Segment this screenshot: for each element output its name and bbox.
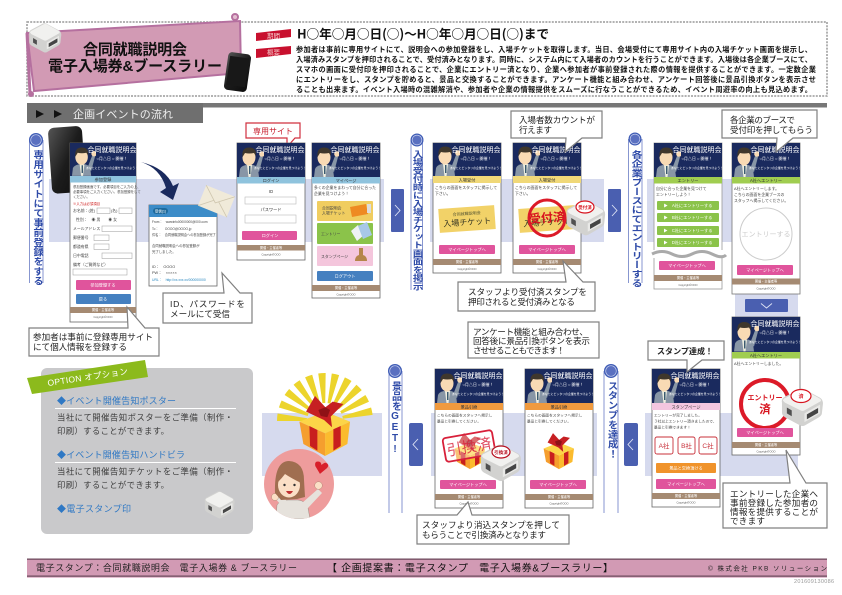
- arrow: down: [745, 299, 788, 312]
- phone: stamp page: 景品と引換できます！: [654, 424, 691, 430]
- step label 4: [388, 364, 402, 513]
- period label: 期間: [267, 32, 280, 40]
- phone: reception ticket: Copyright©OOO: [457, 267, 477, 271]
- email card: URL： http://xx.xxx.xx/000000000: [152, 278, 206, 282]
- band: prize: [262, 413, 382, 476]
- option item: handbill: ◆イベント開催告知ハンドビラ: [57, 449, 185, 460]
- phone: entry completed: マイページトップへ: [746, 430, 784, 436]
- stamp mark: exchanged: [442, 430, 496, 462]
- phone: registration form: あなたにピッタリの企業を見つけよう！: [86, 165, 138, 170]
- callout: reception stamp: [458, 261, 595, 311]
- step label 2: 入場受付時に入場チケット画面を掲示: [411, 150, 423, 290]
- option tag: [27, 360, 148, 394]
- callout: visitor count: [511, 111, 602, 152]
- phone: registration form: Copyright©OOO: [93, 315, 113, 319]
- phone: stamp page: B社: [681, 441, 692, 450]
- phone: registration form: ください。: [73, 194, 90, 199]
- summary text: にエントリーをし、スタンプを貯めると、景品と交換することができます。アンケート機能と組み合わせ、アンケート回答後に景品引換ボタンを表示させ: [296, 75, 816, 84]
- phone: login: ○月△日 ○ 開催！: [264, 155, 296, 161]
- icon: large smartphone: [48, 126, 86, 194]
- band: step 1: [49, 179, 384, 242]
- arrow: next step 1: [391, 189, 404, 232]
- step label 5: [604, 364, 618, 513]
- phone: entry list: 自分に合った企業を見つけて: [656, 186, 707, 191]
- callout: booth stamp: [722, 110, 817, 152]
- summary text: スマホの画面に受付印を押印されることで、企業にエントリー済となり、企業へ参加者が事前登録された際の情報を提供することができます。一定数企業: [296, 65, 816, 74]
- phone: prize exchange: 合同就職説明会: [544, 371, 592, 380]
- step label 4: 景品をGET!: [390, 381, 402, 455]
- email card: 受信(1): [155, 208, 166, 214]
- phone: registration form: 開催・主催者等: [92, 307, 115, 312]
- phone: company entry: 開催・主催者等: [755, 279, 778, 284]
- summary label: 概要: [267, 48, 280, 56]
- phone: reception stamped: 下さい。: [515, 191, 531, 196]
- phone: entry list: 合同就職説明会: [672, 145, 722, 154]
- phone: reception stamped: 入場受付: [539, 176, 555, 184]
- callout: stamp completed: スタンプ達成！: [657, 346, 713, 356]
- option item: handbill: [55, 449, 236, 490]
- phone: prize exchange stamped: マイページトップへ: [449, 482, 487, 488]
- phone: entry completed: 済: [759, 402, 771, 416]
- phone: reception ticket: 開催・主催者等: [456, 259, 479, 264]
- icon: stamp device with exchange mark: [481, 445, 521, 481]
- email card: ID： OOOO: [152, 265, 175, 269]
- phone: entry list: ▶ B社にエントリーする: [664, 214, 712, 221]
- phone: prize exchange stamped: Copyright©OOO: [459, 502, 479, 506]
- phone: entry completed: あなたにピッタリの企業を見つけよう！: [749, 339, 801, 344]
- section heading: event flow: [27, 103, 827, 123]
- phone: entry completed: A社へエントリーしました。: [734, 361, 783, 366]
- phone: my page: Copyright©OOO: [336, 292, 356, 296]
- phone: registration form: ※入力は必須項目: [73, 201, 100, 206]
- phone: reception stamped: Copyright©OOO: [537, 267, 557, 271]
- callout: provide information: 事前登録した参加者の: [730, 497, 818, 508]
- phone: reception ticket: 合同就職説明会: [452, 145, 500, 154]
- icon: stamp device with received mark: 受付済: [578, 204, 592, 211]
- phone: stamp page: C社: [702, 441, 714, 450]
- callout: survey function: アンケート機能と組み合わせ、: [473, 326, 588, 337]
- icon: option stamp device: [205, 491, 235, 518]
- phone: prize exchange stamped: 開催・主催者等: [458, 494, 481, 499]
- phone: registration form: 参加登録: [95, 176, 112, 183]
- phone: reception stamped: 入場チケット: [523, 215, 571, 229]
- phone: reception stamped: 合同就職説明会: [532, 145, 580, 154]
- phone: company entry: ○月△日 ○ 開催！: [759, 155, 791, 161]
- phone: registration form: 都道府県: [73, 244, 89, 249]
- callout: survey function: [468, 322, 599, 358]
- option tag: OPTION オプション: [47, 366, 128, 388]
- phone: entry completed: ○月△日 ○ 開催！: [759, 329, 791, 335]
- option item: handbill: 当社にて開催告知チケットをご準備（制作・: [57, 466, 233, 476]
- phone: registration form: 郵便番号: [73, 235, 89, 240]
- footer copyright: © 株式会社 PKB ソリューション: [708, 564, 827, 572]
- phone: my page: 合同就職説明会: [330, 145, 380, 154]
- phone: reception stamped: [513, 143, 582, 273]
- band: step 3: [647, 179, 800, 242]
- footer left text: 電子スタンプ：合同就職説明会 電子入場券 & ブースラリー: [36, 562, 297, 573]
- callout: registration: [29, 307, 159, 356]
- phone: prize exchange stamped: 景品と引換してください。: [437, 418, 481, 424]
- callout: ID and password by mail: メールにて受信: [170, 308, 230, 319]
- phone: reception ticket: こちらの画面をスタッフに掲示して: [435, 185, 497, 190]
- phone: company entry: A社へエントリーします。: [734, 186, 779, 191]
- phone: stamp page: ○月△日 ○ 開催！: [679, 381, 711, 387]
- icon: stamp device with received mark: [566, 200, 605, 235]
- callout: exchange stamp: スタッフより消込スタンプを押して: [422, 519, 560, 530]
- icon: gift box: [299, 396, 350, 456]
- phone: reception stamped: ○月△日 ○ 開催！: [540, 155, 572, 161]
- phone: login: パスワード: [261, 207, 281, 212]
- stamp mark: received: 受付済: [528, 209, 565, 226]
- phone: stamp page: 開催・主催者等: [675, 493, 698, 498]
- section heading: event flow: 企画イベントの流れ: [73, 107, 173, 121]
- phone: stamp page: A社: [659, 441, 670, 450]
- callout: survey function: させせることもできます！: [473, 346, 565, 356]
- email card: 件名： 合同就職説明会への参加登録が完了: [152, 232, 216, 237]
- footer center text: 【 企画提案書：電子スタンプ 電子入場券&ブースラリー】: [327, 562, 613, 574]
- option item: stamp: ◆電子スタンプ印: [57, 503, 131, 514]
- phone: stamp page: [652, 369, 721, 507]
- phone: entry list: あなたにピッタリの企業を見つけよう！: [671, 165, 723, 170]
- email card: From： wwwinfo00000000@000.com: [152, 220, 208, 224]
- icon: stamp device with entry mark: 済: [798, 393, 804, 400]
- phone: prize exchange: 開催・主催者等: [548, 494, 571, 499]
- phone: stamp page: 合同就職説明会: [670, 371, 720, 380]
- phone: entry completed: Copyright©OOO: [756, 450, 776, 454]
- phone: prize exchange stamped: 合同就職説明会: [454, 371, 502, 380]
- option item: poster: [55, 395, 236, 436]
- icon: envelope: [198, 185, 235, 217]
- phone: stamp page: マイページトップへ: [667, 482, 705, 488]
- phone: stamp page: あなたにピッタリの企業を見つけよう！: [669, 391, 721, 396]
- phone: my page: スタンプページ: [321, 254, 348, 259]
- phone: entry list: ○月△日 ○ 開催！: [681, 155, 713, 161]
- phone: prize exchange: こちらの画面をスタッフへ掲示し: [527, 412, 583, 418]
- phone: prize exchange stamped: あなたにピッタリの企業を見つけよう！: [452, 391, 504, 396]
- panel: option: [27, 360, 253, 534]
- callout: dedicated site: 専用サイト: [253, 126, 293, 136]
- callout: provide information: 情報を提供することが: [730, 506, 818, 517]
- phone: company entry: Copyright©OOO: [756, 286, 776, 290]
- subtitle: 電子入場券&ブースラリー: [48, 57, 222, 75]
- phone: prize exchange stamped: 景品引換: [461, 404, 478, 410]
- callout: survey function: 回答後に景品引換ボタンを表示: [473, 335, 590, 346]
- phone: my page: 企業を見つけよう！: [314, 191, 349, 196]
- callout: booth stamp: 受付印を押してもらう: [730, 124, 813, 135]
- summary text: 入場済みスタンプを押印されることで、受付済みとなります。同時に、システム内にて入場者のカウントを行うことができます。入場後は各企業ブースにて、: [296, 55, 812, 64]
- phone: stamp page: 景品と交換頂ける: [669, 464, 703, 472]
- phone: company entry: A社へエントリー: [750, 177, 782, 184]
- band: step 2: [430, 179, 604, 242]
- phone: registration form: 性別： ◉ 男 ◉ 女: [76, 217, 117, 222]
- illustration: cheering woman: [264, 449, 334, 519]
- phone: prize exchange: マイページトップへ: [539, 482, 577, 488]
- step label 5: スタンプを達成！: [605, 381, 618, 459]
- sun rays: [292, 388, 358, 421]
- phone: company entry: [732, 143, 801, 294]
- phone: my page: あなたにピッタリの企業を見つけよう！: [329, 165, 381, 170]
- callout: registration: にて個人情報を登録する: [33, 341, 127, 352]
- phone: login: Copyright©OOO: [261, 252, 281, 256]
- phone: registration form: [70, 143, 141, 322]
- phone: company entry: 合同就職説明会: [750, 145, 800, 154]
- callout: stamp completed: [648, 341, 724, 372]
- icon: stamp device with exchange mark: 引換済: [494, 449, 508, 456]
- phone: reception ticket: ○月△日 ○ 開催！: [460, 155, 492, 161]
- title ribbon: [27, 14, 241, 97]
- phone: entry completed: [732, 317, 801, 455]
- icon: stamp device in title: [29, 23, 61, 52]
- phone: reception stamped: マイページトップへ: [528, 247, 566, 253]
- phone: login: ログイン: [263, 177, 279, 184]
- phone: prize exchange: Copyright©OOO: [549, 502, 569, 506]
- phone: registration form: 合同就職説明会: [88, 145, 136, 154]
- summary text: [296, 45, 816, 94]
- option item: handbill: 印刷）することができます。: [57, 480, 169, 490]
- phone: my page: ログアウト: [335, 272, 355, 280]
- phone: entry completed: 合同就職説明会: [750, 319, 800, 328]
- phone: prize exchange: [525, 369, 594, 508]
- phone: my page: エントリー: [321, 232, 341, 236]
- arrow: next step 2: [608, 189, 621, 232]
- period date: H○年○月○日(○)〜H○年○月○日(○)まで: [297, 24, 549, 42]
- callout: provide information: [723, 450, 827, 528]
- callout: provide information: エントリーした企業へ: [730, 488, 818, 499]
- email card: [149, 205, 217, 286]
- callout: reception stamp: 押印されると受付済みとなる: [468, 296, 575, 307]
- phone: reception ticket: 入場受付: [459, 176, 475, 184]
- phone: registration form: 参加登録する: [90, 282, 116, 288]
- phone: company entry: マイページトップへ: [746, 268, 784, 274]
- phone: registration form: 備考（ご質問など）: [73, 262, 108, 267]
- email card: 完了しました。: [152, 249, 176, 254]
- phone: prize exchange stamped: [435, 369, 504, 508]
- phone: prize exchange stamped: こちらの画面をスタッフへ掲示し: [437, 412, 493, 418]
- footer bar: [27, 558, 827, 578]
- callout: provide information: できます: [730, 516, 765, 526]
- icon: heart: [313, 461, 329, 475]
- step label 3: 各企業ブースにてエントリーする: [629, 149, 642, 288]
- phone: registration form: ○月△日 ○ 開催！: [96, 155, 128, 161]
- phone: reception stamped: 開催・主催者等: [536, 259, 559, 264]
- phone: login: ログイン: [262, 232, 278, 239]
- phone: registration form: お名前：(姓): [73, 208, 96, 213]
- header frame: [27, 22, 827, 96]
- summary label: [256, 46, 291, 58]
- stamp mark: received: [528, 200, 565, 236]
- phone: registration form: 参加登録画面です。必要項目をご入力の上、: [73, 184, 140, 189]
- phone: stamp page: Copyright©OOO: [676, 500, 696, 504]
- phone: prize exchange: ○月△日 ○ 開催！: [552, 381, 584, 387]
- title: 合同就職説明会: [83, 40, 187, 58]
- phone: my page: 入場チケット: [322, 210, 345, 216]
- phone: reception ticket: 下さい。: [435, 191, 451, 196]
- phone: reception ticket: マイページトップへ: [448, 247, 486, 253]
- document code: 201609130086: [794, 579, 834, 585]
- phone: entry completed: エントリー: [748, 395, 782, 402]
- phone: prize exchange: 景品引換: [551, 404, 568, 410]
- phone: login: 開催・主催者等: [260, 245, 283, 250]
- phone: my page: 多くの企業をまわって自分に合った: [314, 185, 376, 190]
- summary text: ることも出来ます。イベント入場時の混雑解消や、参加者や企業の情報提供をスムーズに行なうことができるため、イベント周遊率の向上も見込めます。: [296, 85, 812, 94]
- phone: login: あなたにピッタリの企業を見つけよう！: [254, 165, 306, 170]
- step label 1: 専用サイトにて事前登録をする: [31, 149, 43, 286]
- phone: registration form: (名): [111, 208, 118, 213]
- phone: stamp page: ３社以上エントリー頂きましたので、: [654, 418, 717, 424]
- phone: registration form: 日中電話: [73, 253, 89, 258]
- callout: ID and password by mail: ID、パスワードを: [170, 299, 245, 309]
- phone: entry list: [651, 143, 726, 289]
- period label: [256, 29, 291, 41]
- callout: exchange stamp: もらうことで引換済みとなります: [422, 529, 546, 540]
- icon: smartphone in title: [223, 52, 252, 92]
- phone: my page: [312, 143, 381, 298]
- phone: prize exchange: あなたにピッタリの企業を見つけよう！: [542, 391, 594, 396]
- phone: reception ticket: あなたにピッタリの企業を見つけよう！: [450, 165, 502, 170]
- callout: visitor count: 入場者数カウントが: [519, 114, 595, 125]
- band: step 5: [431, 413, 597, 476]
- callout: exchange stamp: [417, 502, 569, 544]
- phone: my page: ○月△日 ○ 開催！: [339, 155, 371, 161]
- phone: entry completed: 開催・主催者等: [755, 442, 778, 447]
- arrow: back 2: [624, 423, 638, 466]
- band: connector down: [735, 290, 798, 476]
- phone: login: [237, 143, 306, 260]
- band: step 4: [645, 413, 798, 476]
- callout: registration: 参加者は事前に登録専用サイト: [33, 331, 153, 342]
- phone: reception stamped: あなたにピッタリの企業を見つけよう！: [530, 165, 582, 170]
- phone: entry list: Copyright©OOO: [678, 283, 698, 287]
- phone: entry list: ▶ C社にエントリーする: [663, 227, 713, 234]
- phone: company entry: スタッフへ掲示してください。: [734, 198, 788, 203]
- option item: poster: 印刷）することができます。: [57, 426, 169, 436]
- phone: entry list: 開催・主催者等: [677, 275, 700, 280]
- phone: reception ticket: 合同就職説明会: [452, 209, 481, 217]
- phone: company entry: あなたにピッタリの企業を見つけよう！: [749, 165, 801, 170]
- phone: entry list: マイページトップへ: [668, 263, 706, 269]
- option item: poster: ◆イベント開催告知ポスター: [57, 395, 176, 406]
- phone: entry completed: A社へエントリー: [750, 352, 782, 359]
- phone: stamp page: エントリーが完了しました。: [654, 412, 702, 418]
- callout: dedicated site: [246, 123, 300, 147]
- phone: company entry: エントリーする: [742, 230, 790, 238]
- callout: visitor count: 行えます: [519, 124, 552, 135]
- callout: ID and password by mail: [163, 273, 252, 323]
- phone: reception stamped: こちらの画面をスタッフに掲示して: [515, 185, 577, 190]
- phone: entry list: エントリー: [678, 178, 698, 183]
- phone: registration form: 戻る: [99, 296, 107, 302]
- phone: login: ID: [269, 189, 273, 194]
- phone: reception ticket: [433, 143, 502, 273]
- phone: prize exchange stamped: ○月△日 ○ 開催！: [462, 381, 494, 387]
- phone: login: 合同就職説明会: [256, 145, 304, 154]
- summary text: 参加者は事前に専用サイトにて、説明会への参加登録をし、入場チケットを取得します。当日、会場受付にて専用サイト内の入場チケット画面を提示し、: [296, 45, 812, 54]
- phone: company entry: こちらの画面を企業ブースの: [734, 192, 784, 197]
- phone: entry list: ▶ A社にエントリーする: [664, 202, 712, 209]
- phone: prize exchange: 景品と引換してください。: [527, 418, 571, 424]
- email card: PW： ×××××: [152, 271, 177, 275]
- phone: reception ticket: 入場チケット: [443, 215, 491, 229]
- email card: 合同就職説明会への参加登録が: [152, 243, 200, 248]
- phone: stamp page: スタンプページ: [671, 404, 701, 410]
- phone: registration form: 必要事項をご入力ください。参加登録をして: [73, 189, 141, 194]
- callout: reception stamp: スタッフより受付済スタンプを: [468, 286, 587, 297]
- arrow: back 1: [409, 423, 423, 466]
- icon: stamp device with entry mark: [782, 389, 823, 426]
- phone: my page: 開催・主催者等: [335, 285, 358, 290]
- phone: entry list: ▶ D社にエントリーする: [663, 239, 713, 246]
- email card: To： OOOO@OOOO.jp: [152, 227, 192, 231]
- callout: booth stamp: 各企業のブースで: [730, 114, 795, 125]
- phone: my page: マイページ: [336, 178, 356, 184]
- arrow: curved to mail: [141, 162, 179, 200]
- phone: entry list: エントリーしよう！: [656, 192, 691, 197]
- stamp mark: exchanged: 引換済: [446, 435, 493, 460]
- phone: my page: 合同説明会: [322, 206, 342, 210]
- option item: poster: 当社にて開催告知ポスターをご準備（制作・: [57, 412, 233, 422]
- phone: registration form: メールアドレス: [73, 226, 100, 231]
